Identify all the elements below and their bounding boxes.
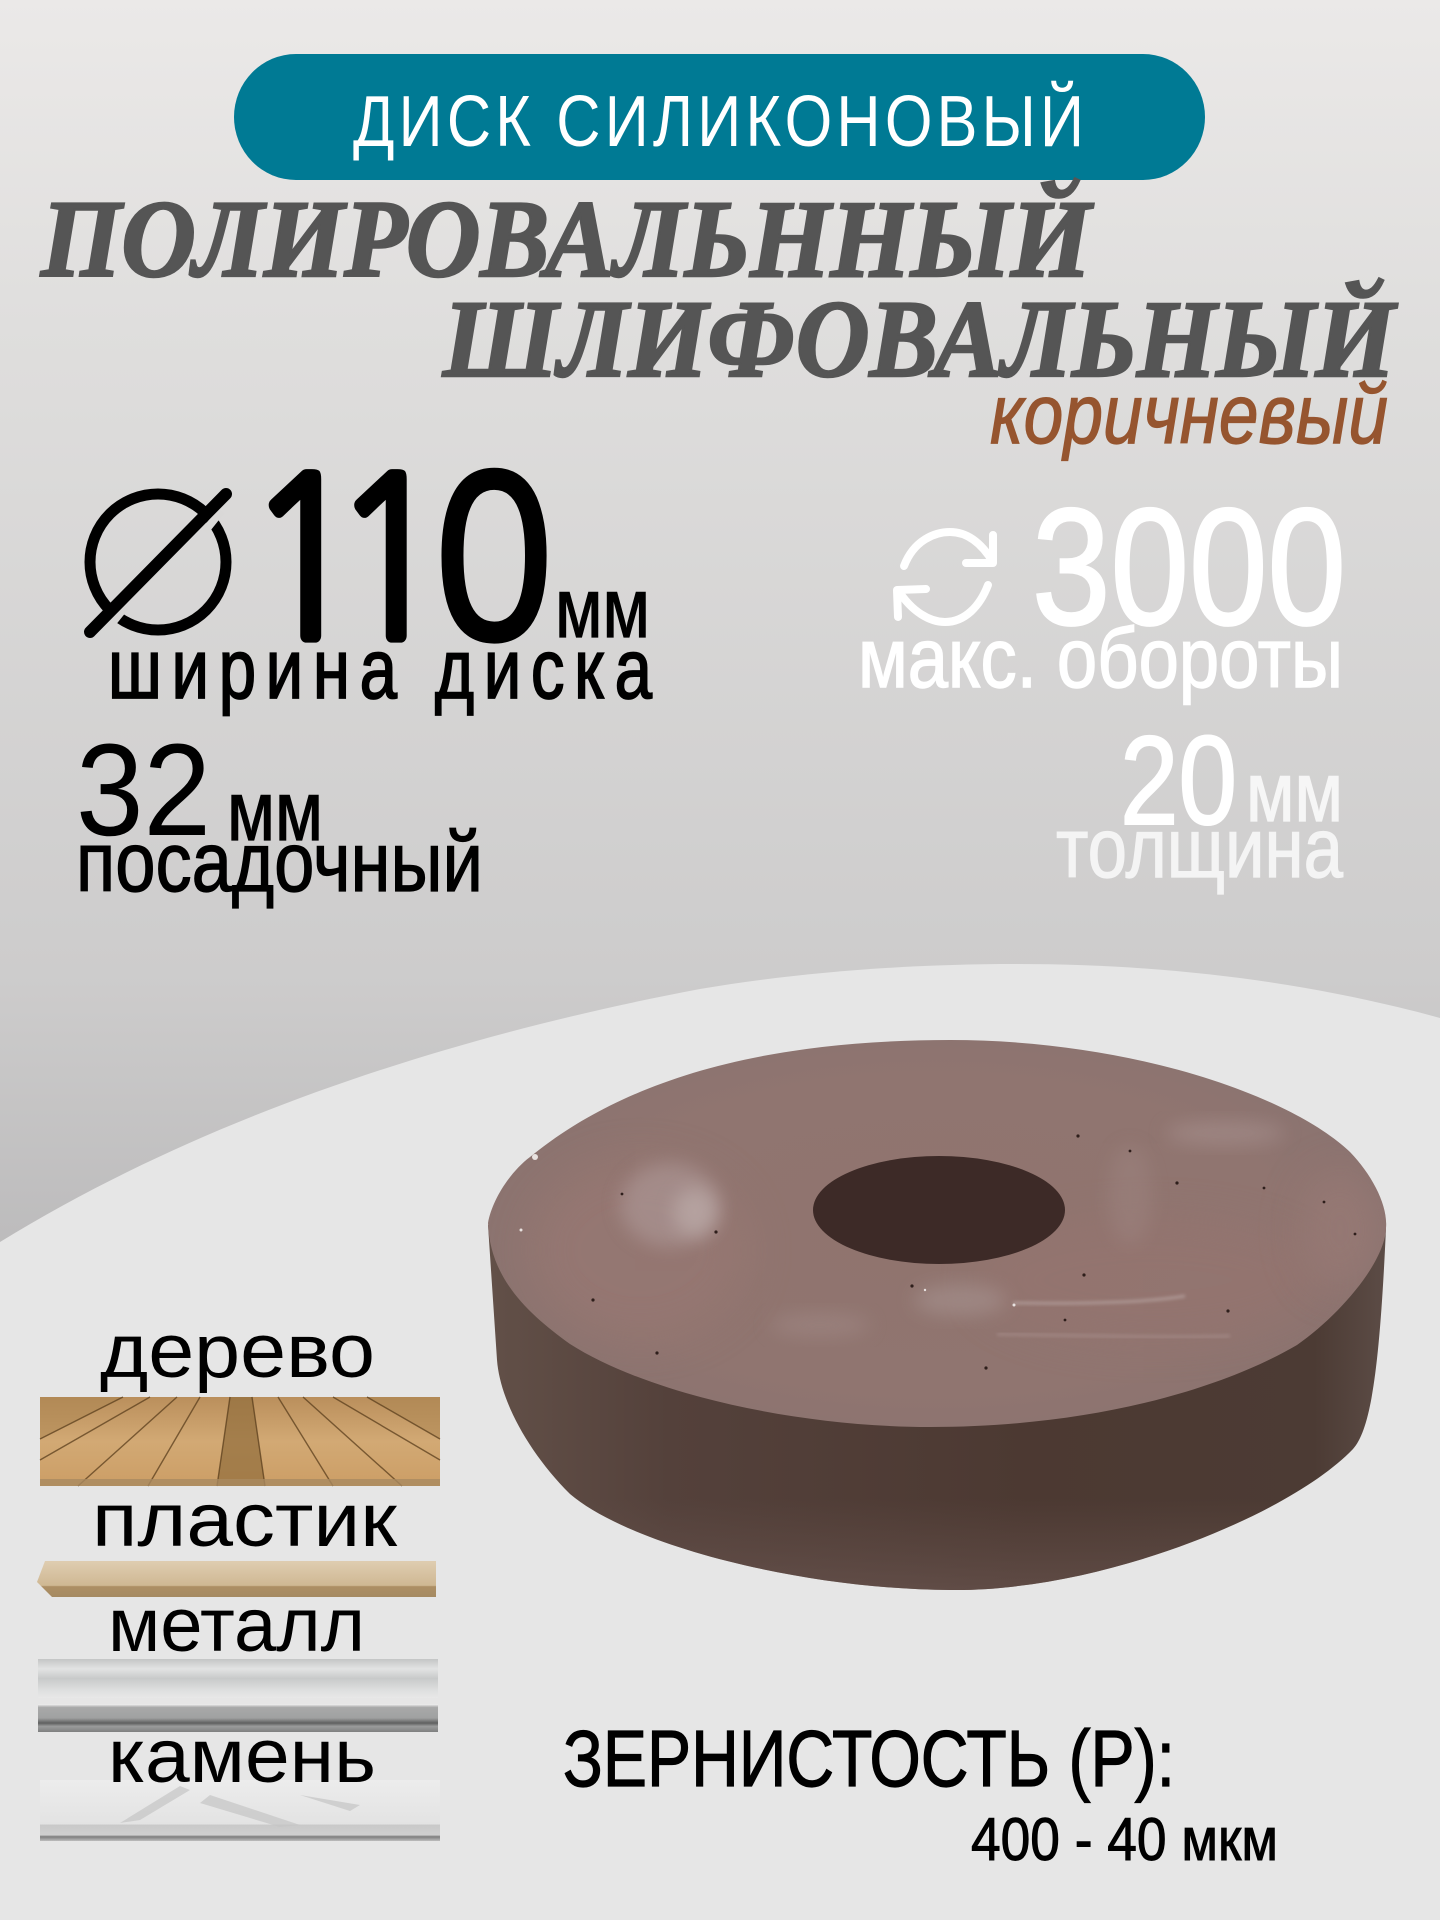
specks [591,1134,1356,1370]
icon: diameter symbol [90,494,226,632]
title pill: ДИСК СИЛИКОНОВЫЙ [353,80,1084,162]
spec: thickness [1056,710,1343,895]
spec: arbor size: посадочный [76,815,483,909]
spec: disc diameter [90,449,653,717]
page background gradient [0,0,1440,1300]
spec: max rpm: 3000 [1032,475,1346,660]
spec: arbor size: 32 [76,716,211,863]
grit label: ЗЕРНИСТОСТЬ (Р): [563,1714,1175,1803]
spec: arbor size [76,716,483,909]
swatch: marble stone [40,1780,440,1841]
product photo: silicone disc [480,1030,1390,1590]
spec: max rpm: макс. обороты [858,611,1343,705]
disc centre hole [813,1156,1065,1264]
swatch: metal bar [38,1659,438,1732]
spec: thickness: толщина [1056,801,1343,895]
spec: disc diameter: 110 [244,449,554,671]
grit value: 400 - 40 мкм [971,1806,1278,1873]
label: plastic: пластик [92,1478,398,1563]
spec: disc diameter: мм [555,561,650,655]
spec: thickness: мм [1246,745,1343,839]
heading: grinding: ШЛИФОВАЛЬНЫЙ [442,277,1398,400]
heading: polishing: ПОЛИРОВАЛЬННЫЙ [40,177,1094,300]
spec: thickness: 20 [1120,710,1237,851]
label: metal: металл [108,1583,365,1668]
light lower swoosh panel [0,964,1440,1920]
swatch: wood planks [40,1397,440,1486]
title pill [234,54,1205,180]
spec: max rpm [858,475,1346,705]
spec: arbor size: мм [227,764,323,858]
swatch: plastic board [37,1561,436,1597]
icon: rotation arrows [897,532,993,622]
disc top face [480,1030,1390,1440]
spec: disc diameter: ширина диска [108,623,653,717]
label: stone: камень [108,1714,376,1799]
materials list [37,1309,440,1841]
disc side wall [488,1225,1386,1590]
label: wood: дерево [100,1309,375,1394]
